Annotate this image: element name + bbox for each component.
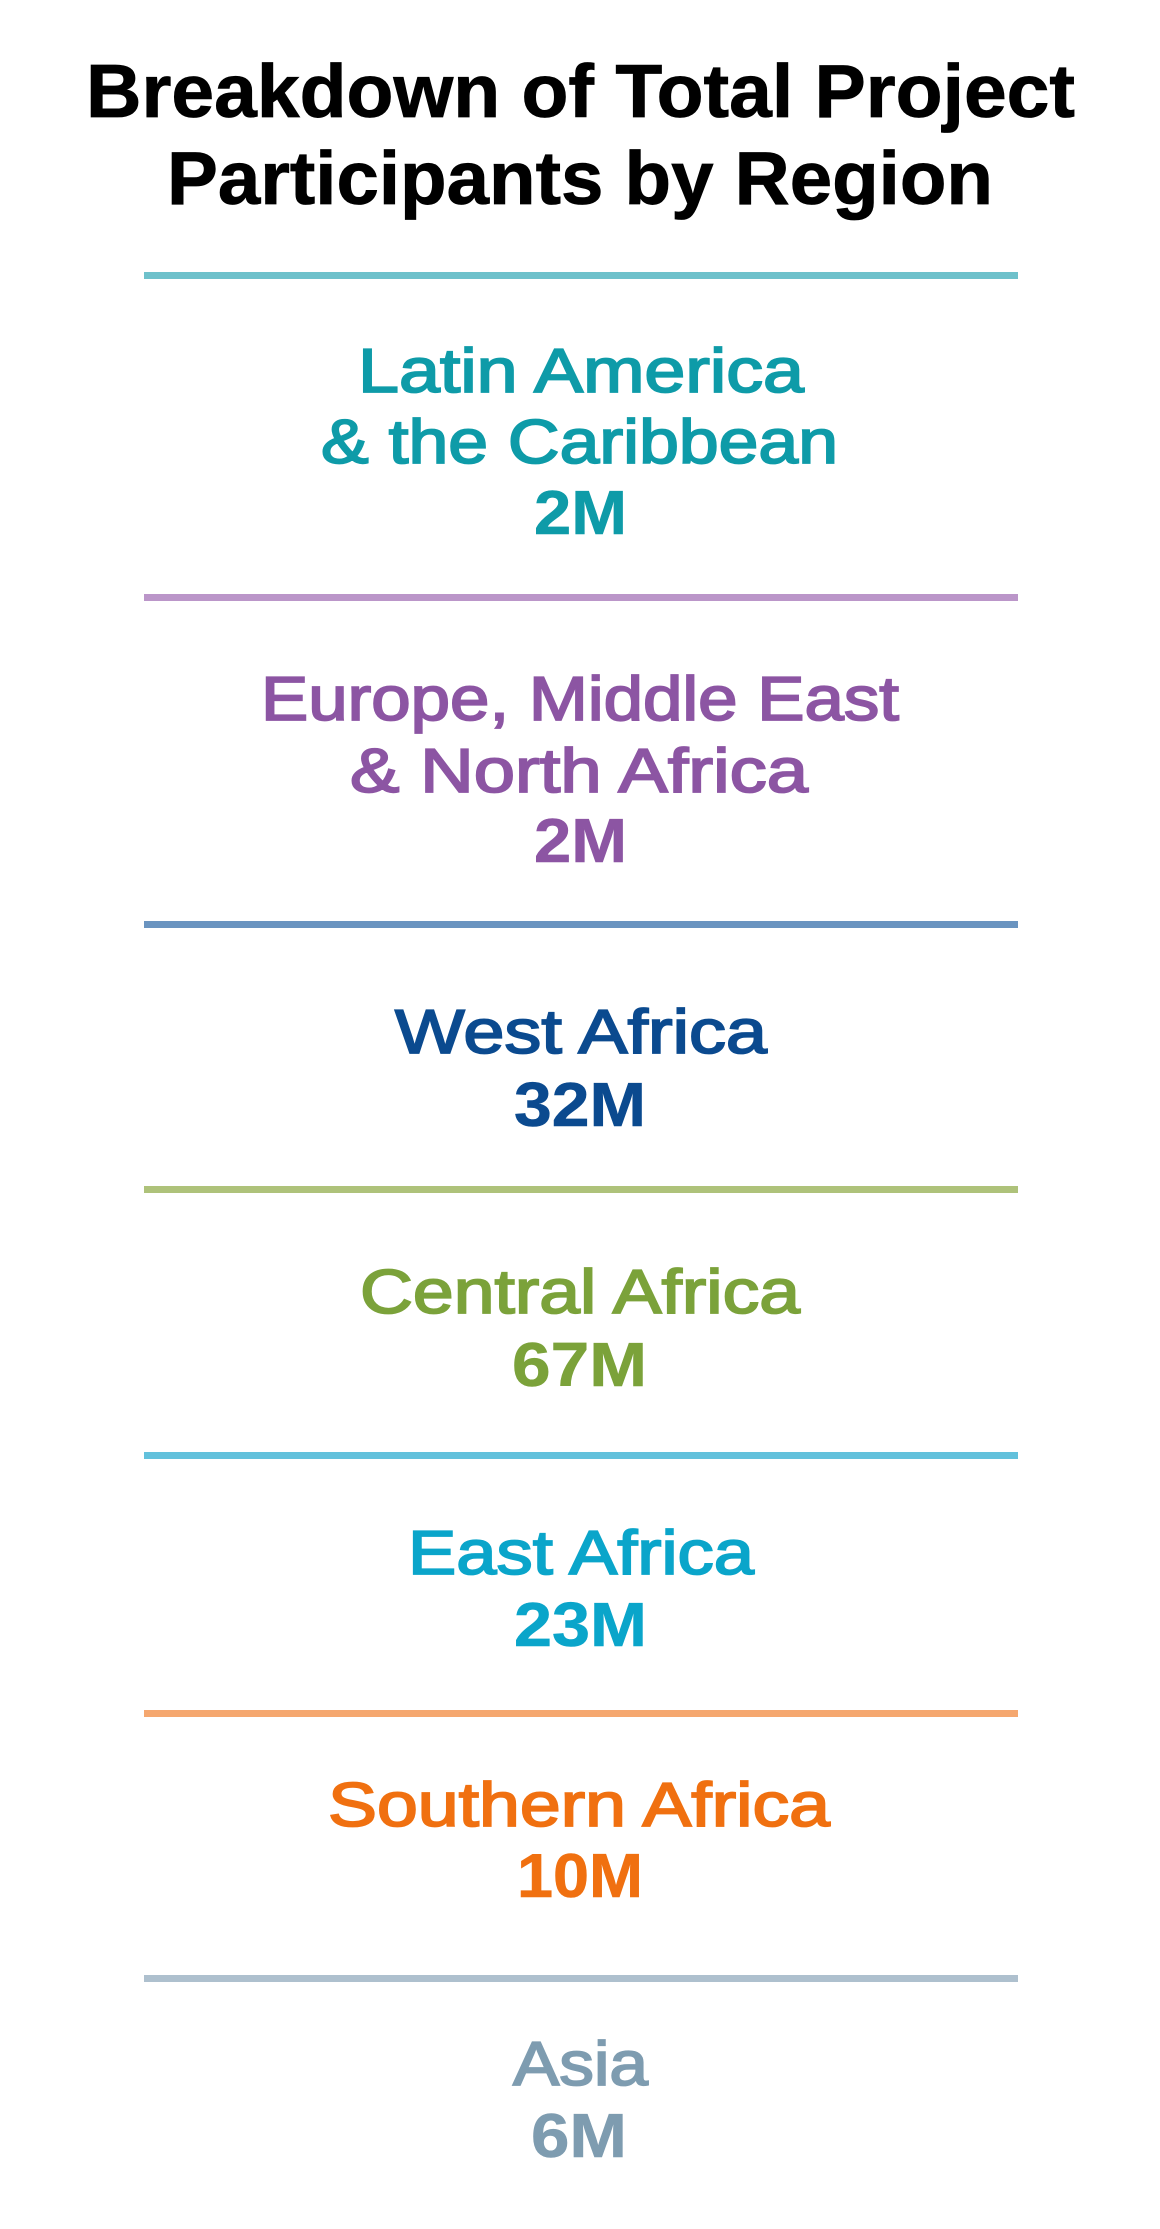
region: Latin America & the Caribbean: Latin America: [358, 337, 805, 406]
region: West Africa: West Africa: [395, 998, 768, 1067]
region: West Africa: [395, 998, 768, 1140]
region: Southern Africa: [328, 1771, 831, 1911]
region: East Africa: [408, 1519, 755, 1660]
title: [86, 49, 1075, 220]
region: Central Africa: 67M: [512, 1331, 647, 1400]
region: Europe, Middle East & North Africa: [261, 665, 899, 876]
title: Breakdown of Total Project: [86, 49, 1075, 133]
region: West Africa: 32M: [514, 1071, 646, 1140]
region: Central Africa: Central Africa: [360, 1258, 801, 1327]
region: Europe, Middle East & North Africa: Europe, Middle East: [261, 665, 899, 734]
region: East Africa: East Africa: [408, 1519, 755, 1588]
region: Latin America & the Caribbean: [321, 337, 838, 548]
region: Southern Africa: 10M: [517, 1842, 643, 1911]
region: Southern Africa: Southern Africa: [328, 1771, 831, 1840]
region: Europe, Middle East & North Africa: & North Africa: [350, 737, 809, 806]
region: Asia: [513, 2030, 649, 2171]
title: Participants by Region: [167, 136, 993, 220]
region: Asia: 6M: [531, 2102, 627, 2171]
region: Latin America & the Caribbean: 2M: [534, 479, 627, 548]
region: Latin America & the Caribbean: & the Caribbean: [321, 408, 838, 477]
region: East Africa: 23M: [514, 1591, 647, 1660]
region: Asia: Asia: [513, 2030, 649, 2099]
region: Central Africa: [360, 1258, 801, 1400]
region: Europe, Middle East & North Africa: 2M: [534, 807, 627, 876]
